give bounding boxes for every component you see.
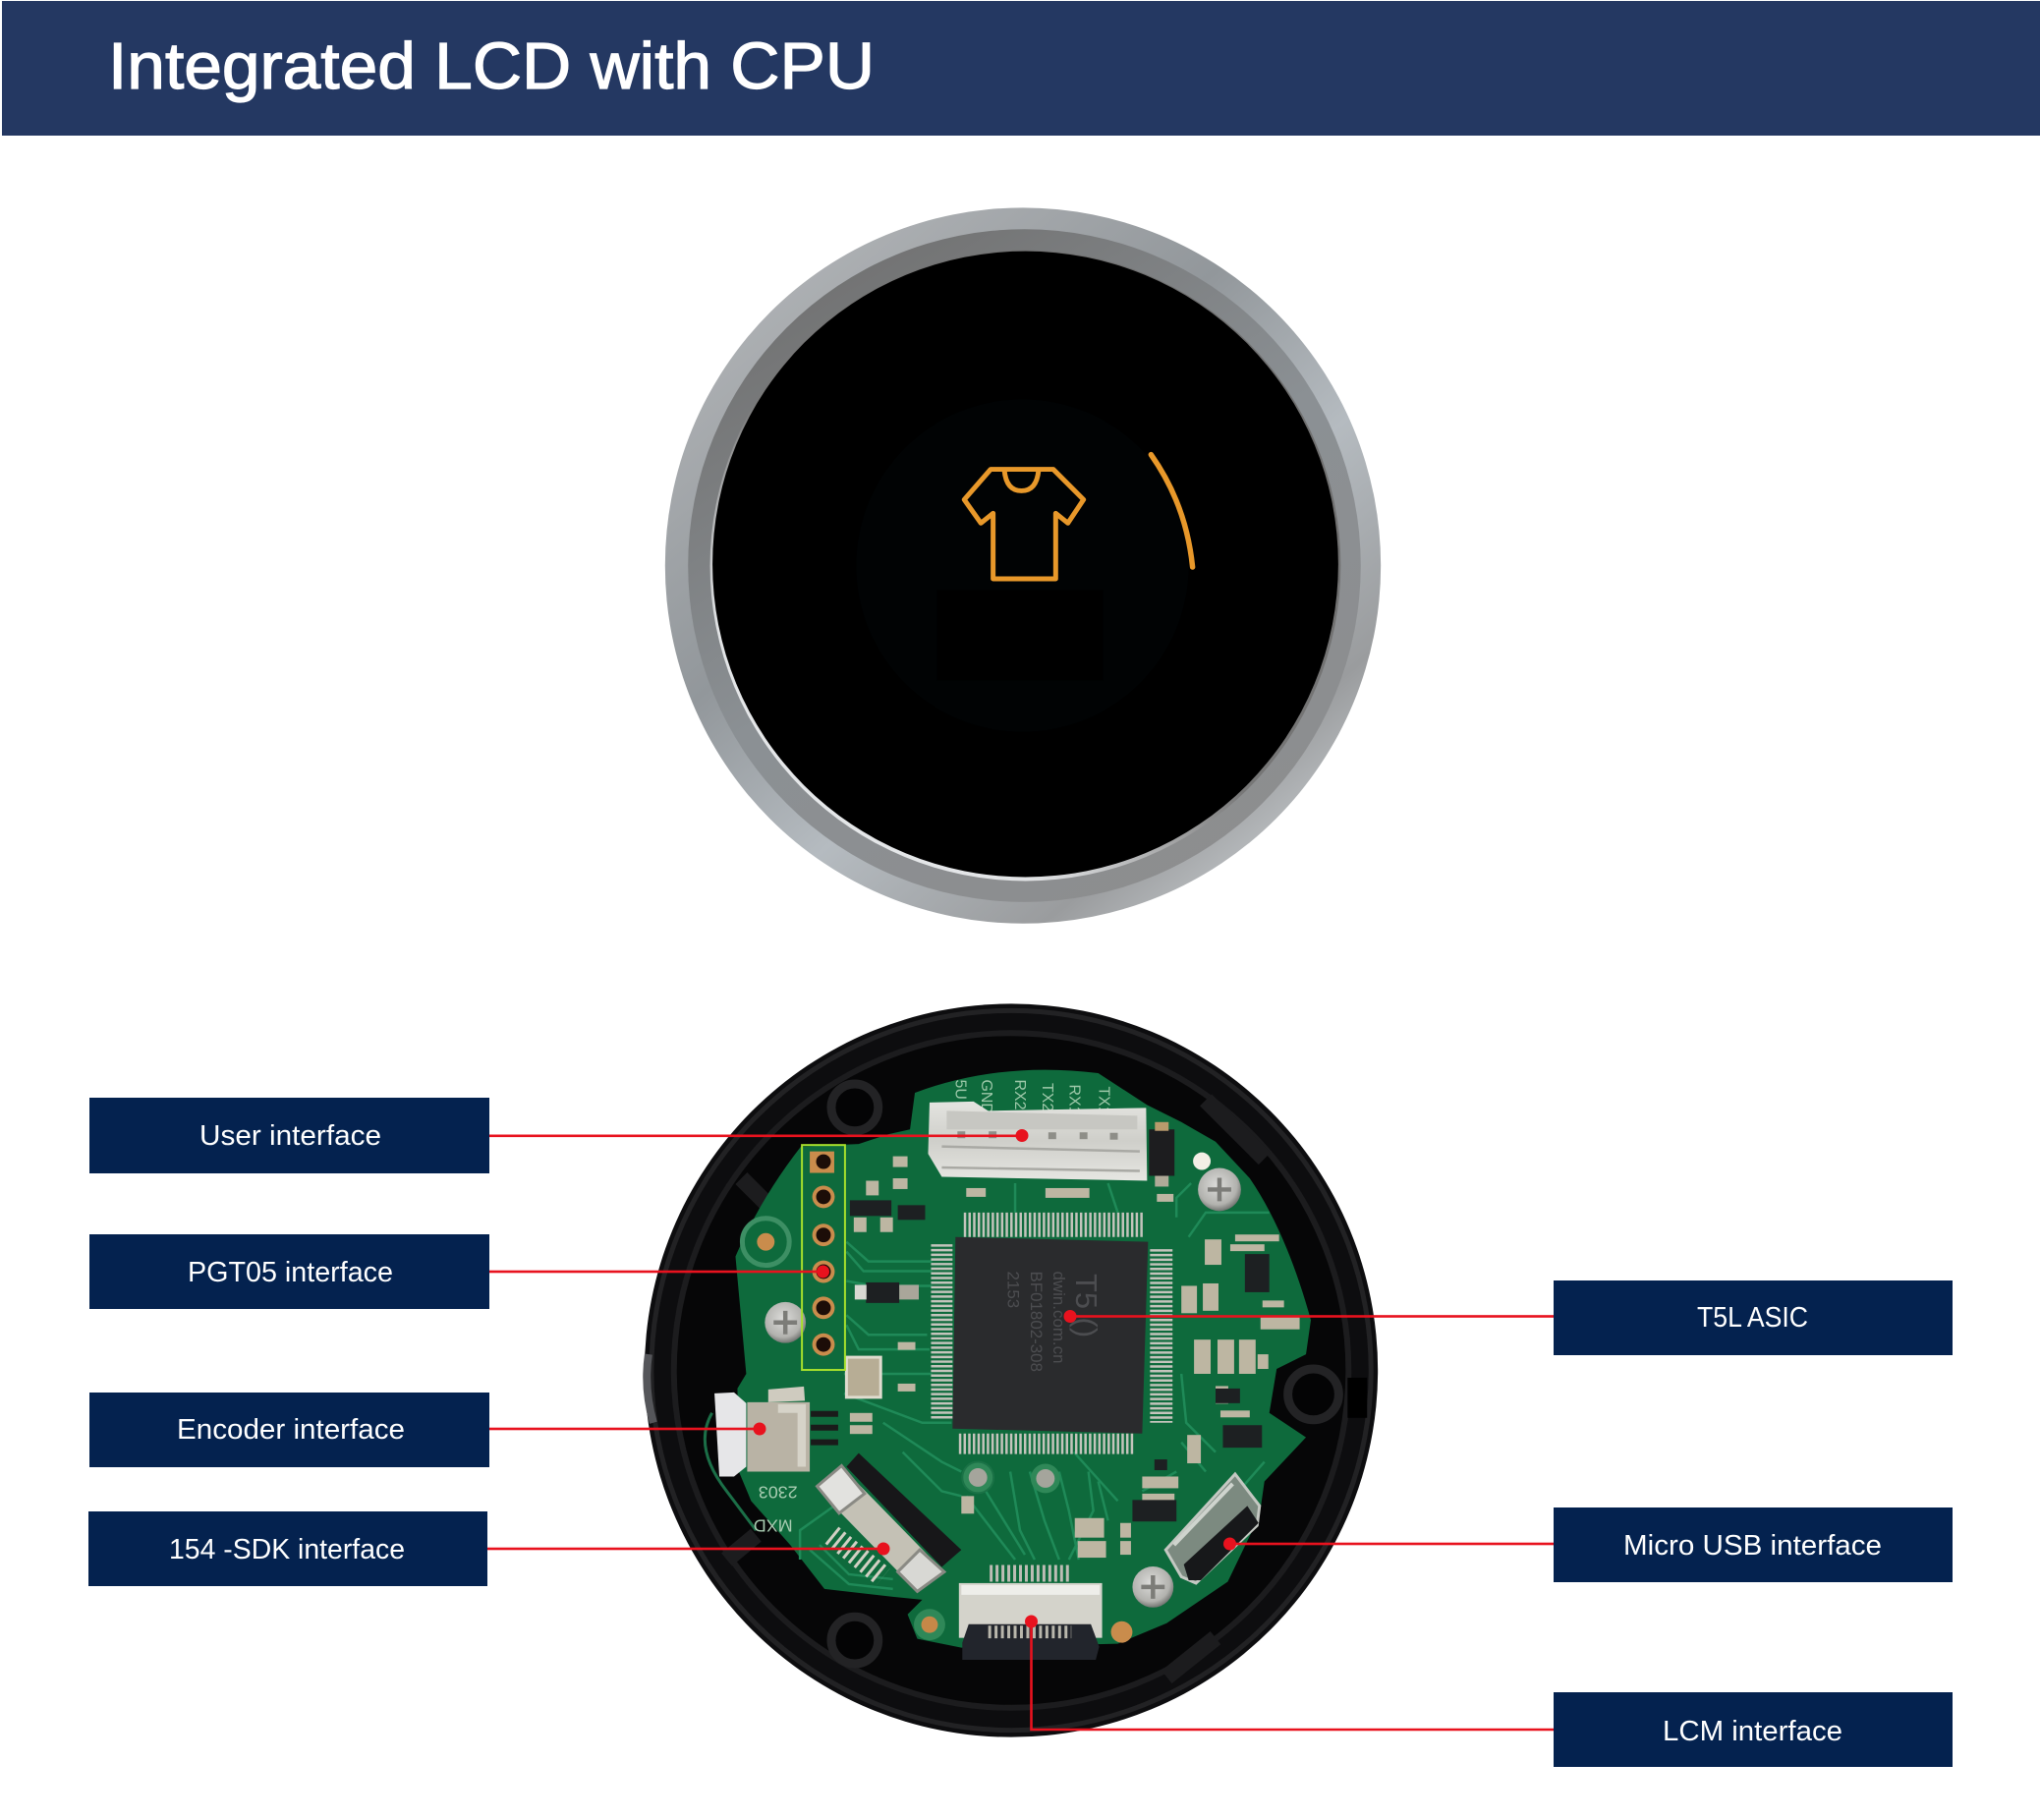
silkscreen pin labels: GND — [978, 1080, 994, 1114]
T5L ASIC chip: T5 () — [1069, 1274, 1104, 1337]
black housing — [645, 1003, 1378, 1737]
label: Micro USB interface: Micro USB interface — [1623, 1530, 1882, 1562]
PCB traces — [800, 1183, 1270, 1589]
silkscreen pin labels: 5U — [951, 1080, 968, 1100]
label: PGT05 interface — [89, 1234, 489, 1309]
screw bosses — [831, 1084, 1338, 1664]
screws — [765, 1168, 1241, 1608]
leader line: Encoder interface — [489, 1423, 766, 1435]
silkscreen pin labels — [951, 1080, 1112, 1115]
label: LCM interface: LCM interface — [1663, 1716, 1842, 1747]
PCB mounting pads — [742, 1219, 1132, 1643]
label: 154 -SDK interface: 154 -SDK interface — [169, 1534, 405, 1565]
label: T5L ASIC — [1554, 1280, 1953, 1355]
LCM flat cable connector — [959, 1573, 1103, 1660]
crystal oscillator — [846, 1357, 880, 1397]
orange progress arc — [1151, 455, 1193, 567]
154-SDK flat cable connector — [818, 1453, 961, 1591]
T5L ASIC chip: dwin.com.cn — [1049, 1272, 1068, 1363]
SMD components — [846, 1157, 1300, 1558]
label: T5L ASIC: T5L ASIC — [1697, 1302, 1808, 1334]
leader line: User interface — [489, 1129, 1028, 1142]
T5L ASIC chip: 2153 — [1004, 1272, 1023, 1308]
label: PGT05 interface: PGT05 interface — [188, 1257, 393, 1288]
label: 154 -SDK interface — [88, 1511, 487, 1586]
T5L ASIC chip — [952, 1237, 1148, 1434]
label: Encoder interface: Encoder interface — [177, 1414, 405, 1446]
black LCD screen — [712, 252, 1338, 877]
icon: orange t-shirt — [964, 470, 1084, 579]
silkscreen board code — [754, 1482, 798, 1535]
green PCB — [735, 1070, 1311, 1648]
leader line: LCM interface — [1025, 1616, 1554, 1730]
header banner — [2, 1, 2040, 136]
product photo: circuit board rear view — [645, 1003, 1378, 1737]
label: LCM interface — [1554, 1692, 1953, 1767]
T5L ASIC chip: BF01802-308 — [1027, 1272, 1046, 1372]
PGT05 yellow-green highlight box — [802, 1145, 845, 1370]
leader line: 154 -SDK interface — [487, 1543, 890, 1555]
label: Micro USB interface — [1554, 1507, 1953, 1582]
user interface white connector — [928, 1102, 1174, 1186]
label: User interface: User interface — [199, 1120, 381, 1152]
silkscreen pin labels: RX2 — [1011, 1080, 1028, 1110]
micro USB connector — [1165, 1474, 1260, 1583]
leader line: T5L ASIC — [1063, 1310, 1554, 1323]
silkscreen pin labels: TX1 — [1096, 1086, 1112, 1115]
metal bezel — [665, 207, 1381, 924]
silkscreen board code: MXD — [754, 1515, 793, 1535]
silkscreen board code: 2303 — [759, 1482, 798, 1502]
leader line: Micro USB interface — [1223, 1537, 1554, 1551]
T5L chip pins — [941, 1224, 1162, 1444]
leader line: PGT05 interface — [489, 1266, 829, 1278]
product photo: round display front view — [665, 207, 1381, 924]
white LED dot — [1193, 1153, 1211, 1170]
label: User interface — [89, 1098, 489, 1173]
encoder connector — [714, 1387, 838, 1476]
title: Integrated LCD with CPU — [108, 29, 875, 103]
silkscreen pin labels: RX1 — [1066, 1084, 1083, 1115]
label: Encoder interface — [89, 1393, 489, 1467]
PGT05 header holes — [810, 1152, 834, 1356]
silkscreen pin labels: TX2 — [1039, 1083, 1055, 1111]
